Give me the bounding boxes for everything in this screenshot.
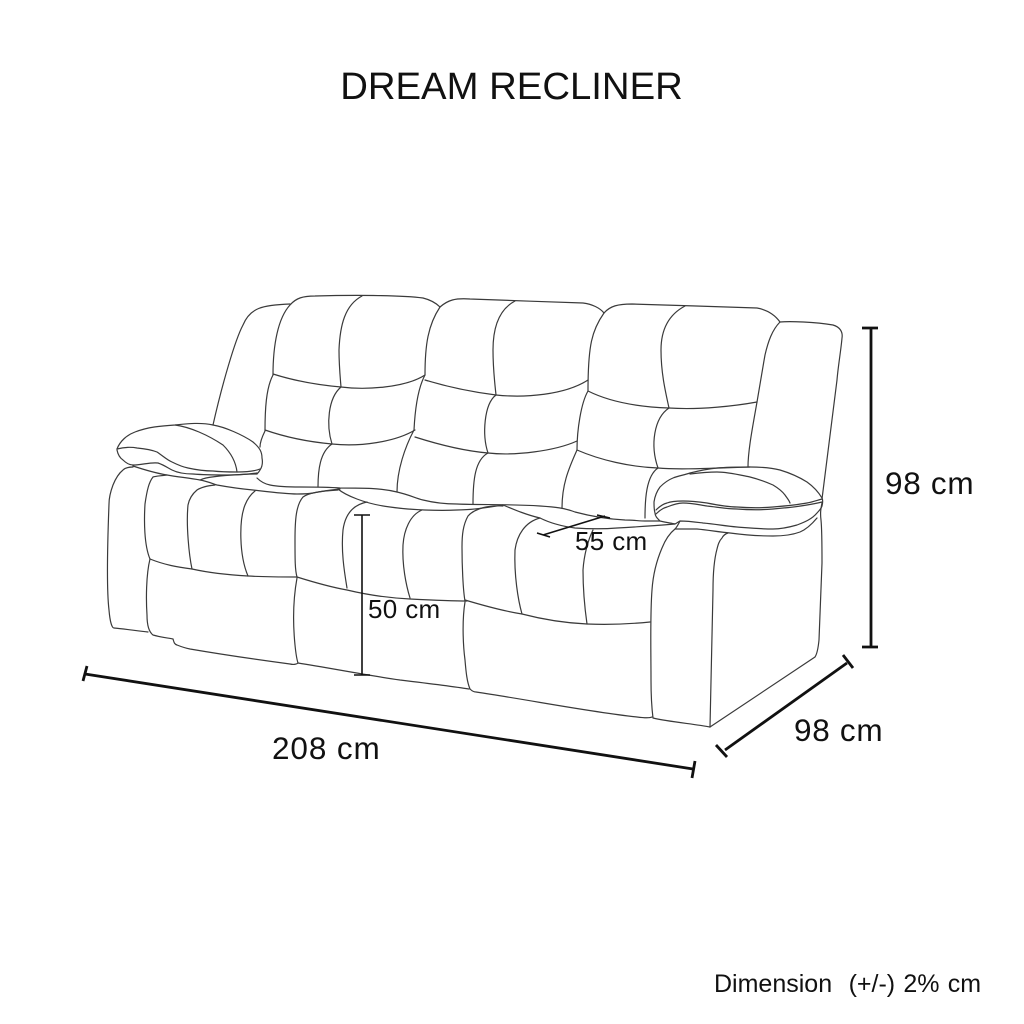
seat depth line bbox=[537, 515, 610, 537]
label: seat height: 50 cm bbox=[368, 594, 441, 624]
seat cushion centre bbox=[297, 502, 469, 689]
left arm back bbox=[213, 304, 290, 425]
label: overall width: 208 cm bbox=[272, 730, 381, 766]
label: overall depth: 98 cm bbox=[794, 712, 883, 748]
seat cushion right bbox=[462, 505, 675, 718]
back cushion left bbox=[260, 295, 440, 487]
seat back edge bbox=[257, 478, 660, 521]
back cushion centre bbox=[397, 299, 604, 504]
left arm front bbox=[107, 467, 148, 632]
overall depth line bbox=[716, 655, 853, 757]
left arm cushion bbox=[117, 423, 262, 480]
right arm back bbox=[780, 322, 842, 499]
overall height line bbox=[862, 328, 878, 647]
back cushion right bbox=[562, 304, 780, 518]
title: DREAM RECLINER bbox=[340, 65, 683, 108]
right arm front bbox=[651, 503, 822, 727]
footnote: Dimension (+/-) 2% cm bbox=[714, 970, 981, 998]
label: overall height: 98 cm bbox=[885, 465, 974, 501]
seat cushion left bbox=[145, 475, 338, 664]
overall width line bbox=[83, 666, 695, 778]
dimension lines bbox=[83, 328, 878, 778]
label: seat depth: 55 cm bbox=[575, 526, 648, 556]
sofa line drawing bbox=[107, 295, 842, 727]
right arm cushion bbox=[654, 467, 823, 536]
seat height line bbox=[354, 515, 370, 675]
